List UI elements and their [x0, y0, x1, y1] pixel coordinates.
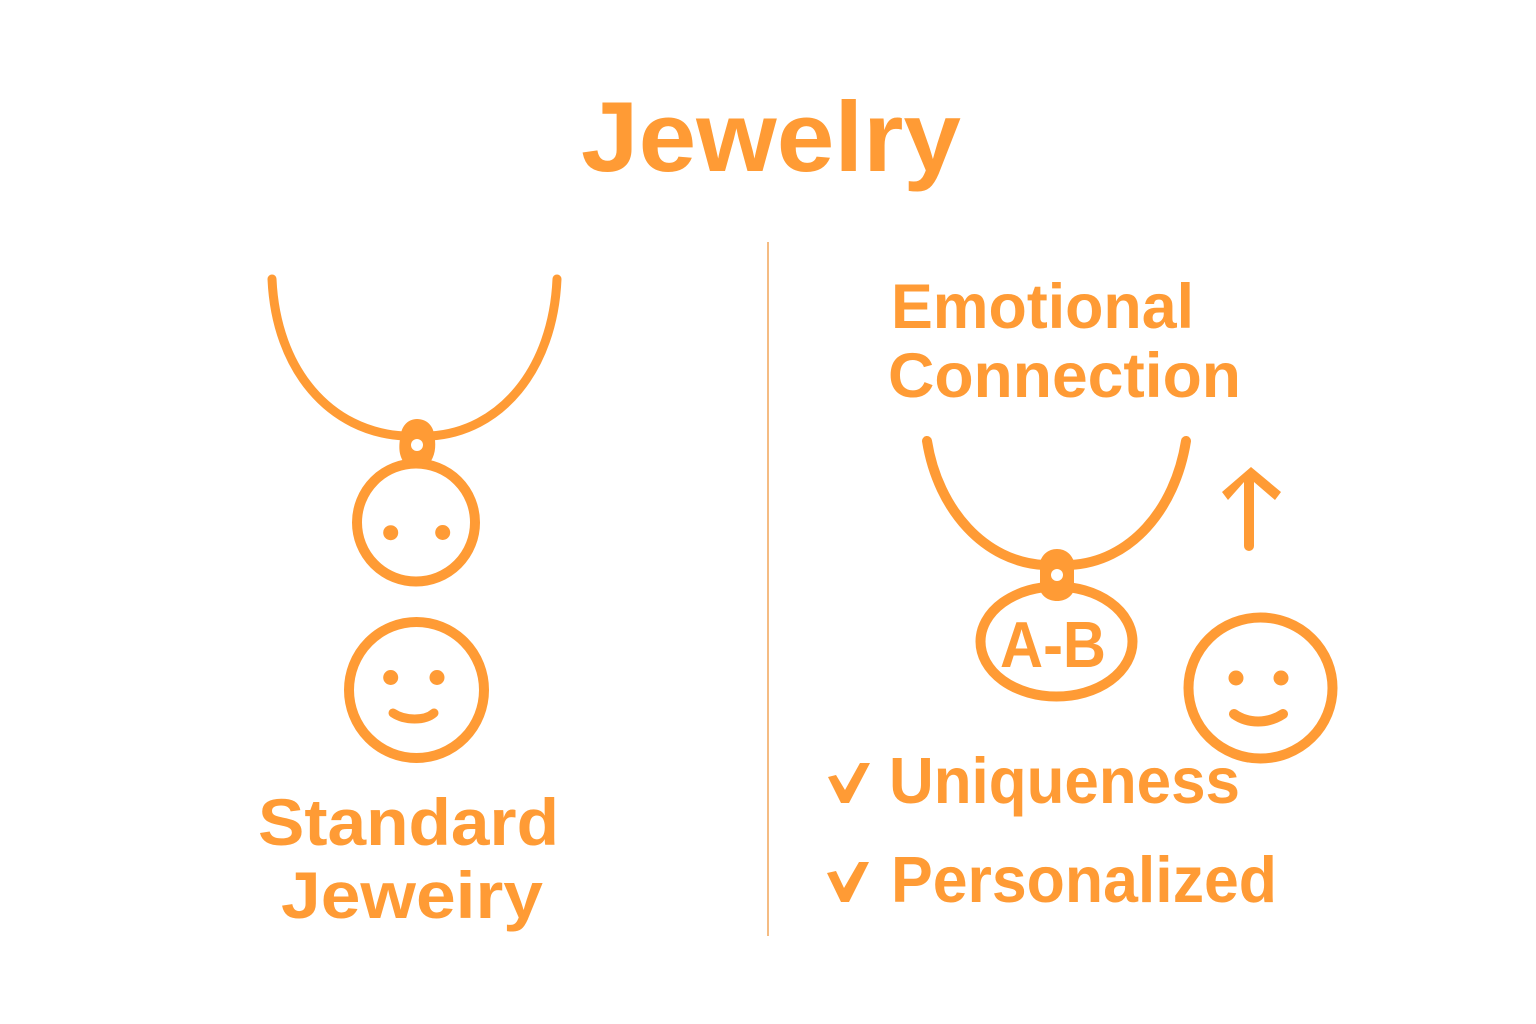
heading: emotional connection: Connection	[888, 341, 1241, 411]
label: standard jewelry: Standard	[258, 785, 559, 859]
icon: necklace with engraved pendant: A-B	[1000, 608, 1106, 681]
label: standard jewelry: Jeweiry	[281, 858, 543, 932]
panel: standard jewelry	[258, 279, 559, 932]
icon: up arrow	[1222, 467, 1281, 546]
icon: smiling face	[349, 622, 484, 758]
icon: necklace with engraved pendant	[927, 441, 1186, 696]
heading: emotional connection: Emotional	[891, 272, 1194, 342]
panel: personalized jewelry	[827, 272, 1332, 916]
list item: uniqueness: Uniqueness	[889, 744, 1240, 817]
title: Jewelry	[581, 81, 961, 192]
icon: necklace with round pendant	[272, 279, 557, 582]
heading: emotional connection	[888, 272, 1241, 411]
icon: smiling face	[1188, 618, 1332, 758]
list item: personalized: Personalized	[891, 843, 1277, 916]
label: standard jewelry	[258, 785, 559, 932]
